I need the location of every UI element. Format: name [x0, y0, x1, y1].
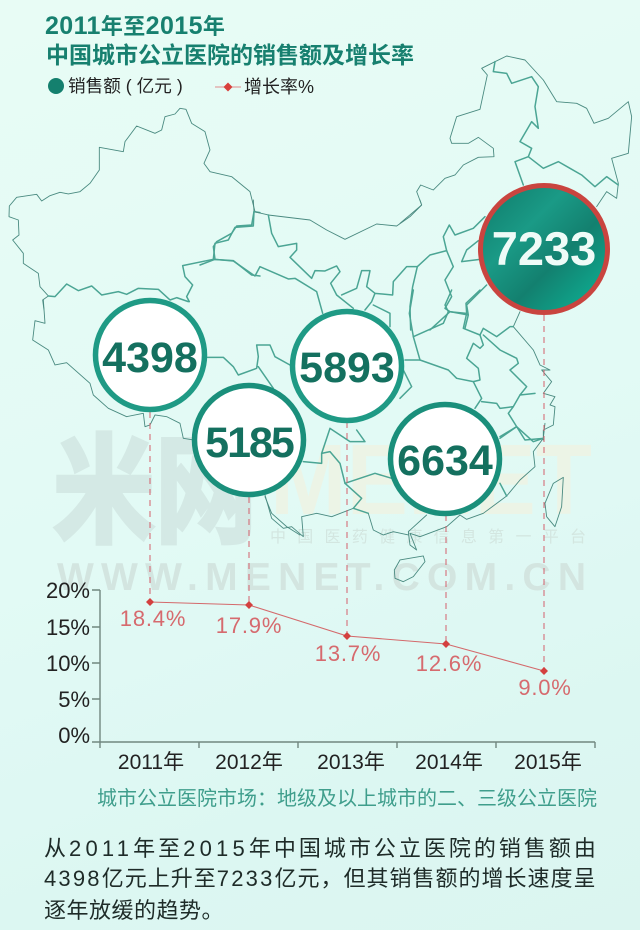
x axis labels: 2012年: [215, 751, 283, 774]
bubble: 2014 sales: 6634: [397, 437, 493, 485]
chart axes: [92, 590, 595, 748]
y axis labels: 20%: [46, 578, 90, 603]
rate labels: 13.7%: [315, 641, 381, 666]
bubble: 2014 sales: [390, 404, 500, 514]
rate labels: 12.6%: [416, 651, 482, 676]
x axis labels: 2014年: [415, 751, 483, 774]
rate labels: 17.9%: [216, 613, 282, 638]
bubble: 2013 sales: 5893: [299, 344, 395, 392]
note: 城市公立医院市场：地级及以上城市的二、三级公立医院: [97, 787, 597, 810]
bubble: 2011 sales: [96, 300, 204, 410]
x axis labels: 2013年: [317, 751, 385, 774]
watermark: 中国医药健康信息第一平台: [270, 528, 586, 546]
map of China: [9, 56, 632, 582]
bubble: 2011 sales: 4398: [102, 334, 198, 382]
watermark: [53, 424, 592, 599]
summary text: 逐年放缓的趋势。: [44, 898, 224, 923]
bubble: 2012 sales: 5185: [205, 419, 294, 467]
bubble: 2015 sales: 7233: [492, 222, 596, 275]
y axis labels: 15%: [46, 615, 90, 640]
summary text: 4398亿元上升至7233亿元，但其销售额的增长速度呈: [44, 866, 597, 891]
rate labels: 9.0%: [518, 675, 572, 700]
legend: 增长率%: [244, 77, 314, 97]
y axis labels: 0%: [58, 723, 90, 748]
bubble: 2013 sales: [292, 312, 402, 420]
legend: [48, 76, 314, 97]
y axis labels: 10%: [46, 651, 90, 676]
y axis labels: [46, 578, 90, 748]
x axis labels: 2011年: [118, 751, 184, 774]
growth line: [146, 598, 548, 675]
dashed connector lines: [150, 315, 544, 671]
legend: 销售额 ( 亿元 ): [68, 76, 183, 96]
watermark: 米网: [53, 427, 257, 559]
summary text: 从2011年至2015年中国城市公立医院的销售额由: [44, 836, 599, 861]
bubble: 2012 sales: [194, 386, 304, 494]
rate labels: 18.4%: [120, 606, 186, 631]
title: 2011年至2015年: [45, 12, 225, 40]
title: [45, 12, 414, 68]
y axis labels: 5%: [58, 687, 90, 712]
x axis labels: 2015年: [514, 751, 582, 774]
growth rate line chart: [46, 578, 595, 774]
summary text: [44, 836, 599, 923]
watermark: MENET: [270, 424, 592, 536]
x axis labels: [118, 751, 582, 774]
bubble: 2015 sales: [480, 186, 608, 312]
title: 中国城市公立医院的销售额及增长率: [46, 42, 414, 68]
rate labels: [120, 606, 572, 700]
watermark: WWW.MENET.COM.CN: [57, 556, 586, 599]
